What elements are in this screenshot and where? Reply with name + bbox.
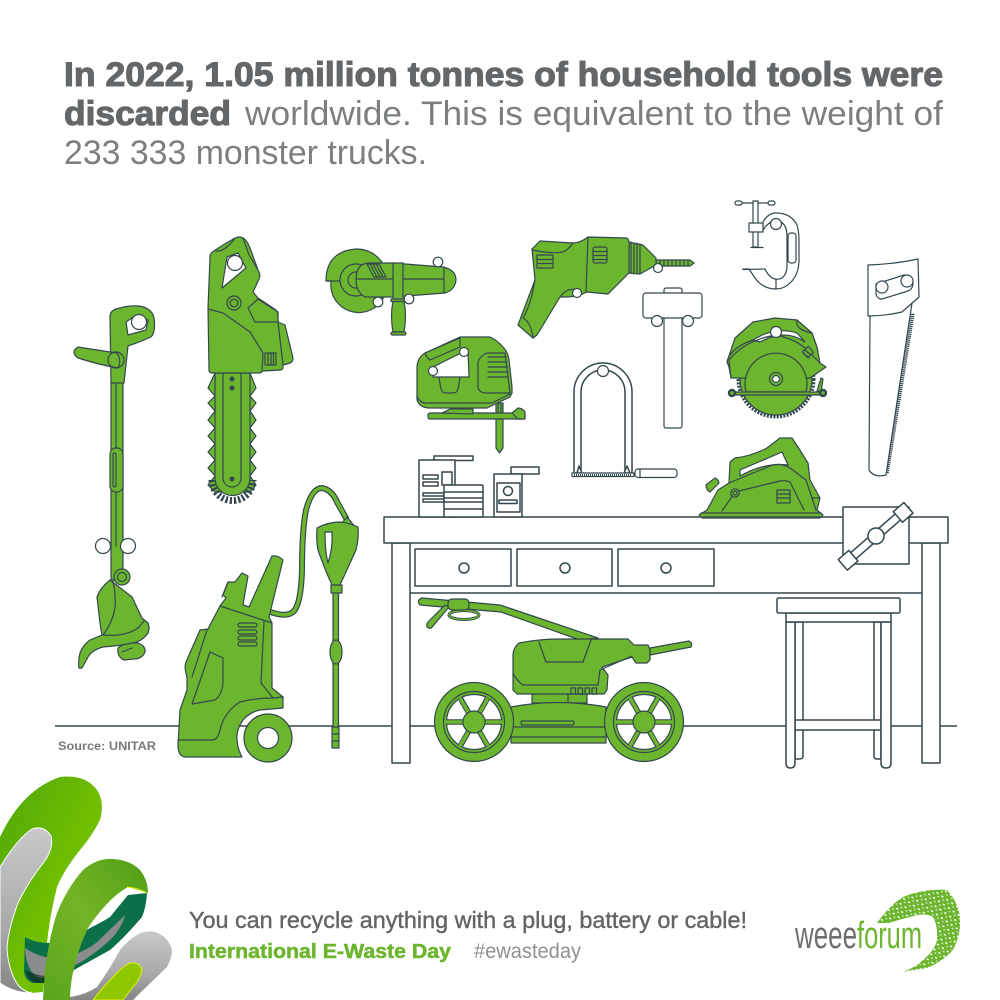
tool: electric drill (518, 237, 694, 338)
tool: mallet (643, 288, 702, 428)
campaign text: International E-Waste Day (189, 941, 452, 963)
tool: circular saw (727, 318, 827, 416)
tool: electric planer (699, 438, 823, 518)
tool: hand saw (868, 259, 919, 476)
headline (64, 56, 944, 172)
logo: weeeforum: weee (794, 915, 857, 957)
tool: pressure washer (178, 488, 358, 762)
workbench (384, 517, 948, 763)
bench machines (419, 456, 539, 517)
floor line (55, 725, 957, 727)
tool: c-clamp (735, 201, 799, 289)
tool: jigsaw (417, 337, 525, 453)
campaign text: #ewasteday (474, 940, 581, 963)
source note: Source: UNITAR (58, 739, 156, 753)
tool: lawn mower (418, 598, 692, 762)
tool: chainsaw (208, 237, 293, 500)
headline: In 2022, 1.05 million tonnes of household tools were (64, 56, 943, 94)
campaign text: You can recycle anything with a plug, battery or cable! (189, 907, 747, 933)
logo: weeeforum (794, 890, 960, 972)
bench vice (838, 502, 914, 571)
headline: discarded (64, 95, 231, 133)
headline: 233 333 monster trucks. (64, 134, 427, 172)
tool: angle grinder (326, 249, 456, 335)
headline: worldwide. This is equivalent to the weight of (244, 95, 944, 133)
tool: string trimmer (74, 306, 155, 668)
tool: coping saw (572, 363, 677, 478)
stool (777, 598, 900, 768)
logo: weeeforum: forum (857, 915, 922, 957)
campaign text (189, 907, 747, 963)
logo: e-waste swirl (0, 777, 172, 1000)
